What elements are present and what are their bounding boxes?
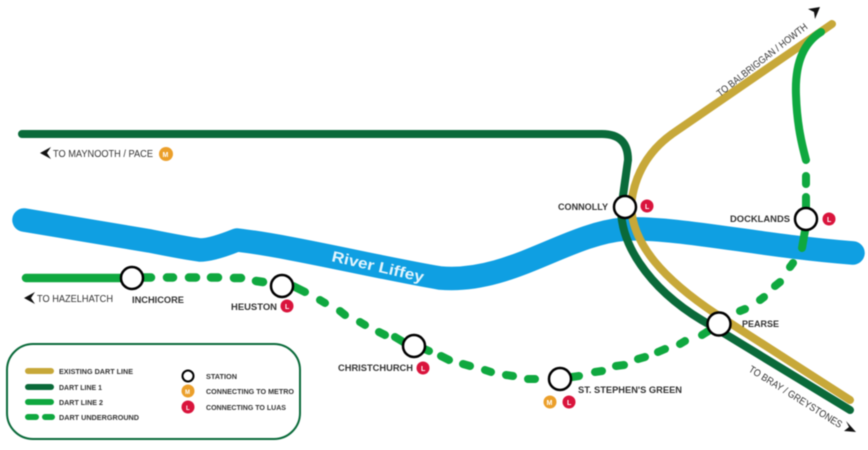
legend: station <box>182 370 237 382</box>
station: St. Stephen's Green: M <box>546 400 552 407</box>
station: Christchurch: L <box>421 366 426 373</box>
legend: connecting to Luas: CONNECTING TO LUAS <box>206 405 286 412</box>
station: Heuston: HEUSTON <box>231 302 277 312</box>
legend: connecting to Luas <box>182 400 286 414</box>
river: Liffey <box>24 220 853 286</box>
direction label: Balbriggan / Howth: TO BALBRIGGAN / HOWTH <box>715 22 810 99</box>
station: St. Stephen's Green <box>544 368 682 408</box>
line: DART underground Inchicore to Heuston <box>143 278 263 282</box>
legend: DART line 1: DART LINE 1 <box>59 385 102 392</box>
station: Docklands: DOCKLANDS <box>730 214 790 224</box>
legend: DART line 2: DART LINE 2 <box>59 400 103 407</box>
legend: existing DART line <box>28 369 133 376</box>
station: Pearse: PEARSE <box>742 319 779 329</box>
station: Docklands <box>730 208 836 230</box>
legend: DART line 2 <box>28 400 103 407</box>
legend: existing DART line: EXISTING DART LINE <box>59 369 133 376</box>
station: Connolly: L <box>645 204 650 211</box>
station: Heuston: L <box>285 304 290 311</box>
line: DART underground centre <box>565 325 718 378</box>
legend: DART line 1 <box>28 385 102 392</box>
line: DART line 2 solid north <box>796 32 821 160</box>
direction label: Maynooth / Pace: TO MAYNOOTH / PACE <box>53 149 153 160</box>
line: DART underground Heuston to Christchurch <box>293 286 405 343</box>
line: existing DART <box>631 24 850 400</box>
station: St. Stephen's Green: L <box>567 400 572 407</box>
legend: DART underground: DART UNDERGROUND <box>59 415 139 422</box>
direction label: Hazelhatch: TO HAZELHATCH <box>37 294 113 305</box>
line: DART line 2 solid west <box>26 274 132 282</box>
direction label: Bray / Greystones: TO BRAY / GREYSTONES <box>746 364 844 431</box>
station: Christchurch <box>338 335 430 374</box>
legend: connecting to Luas: L <box>186 406 190 412</box>
direction label: Maynooth / Pace: M <box>162 152 168 159</box>
station: St. Stephen's Green: ST. STEPHEN'S GREEN <box>578 385 682 395</box>
station: Inchicore <box>121 267 184 305</box>
legend: station: STATION <box>206 374 237 381</box>
legend: connecting to metro: M <box>185 390 190 396</box>
legend: connecting to metro <box>182 384 295 398</box>
station: Christchurch: CHRISTCHURCH <box>338 363 413 373</box>
river label: River Liffey <box>330 248 426 286</box>
legend <box>7 344 300 439</box>
line: DART underground south-east <box>740 225 806 311</box>
legend: DART underground <box>28 415 139 422</box>
direction label: Hazelhatch <box>24 292 113 305</box>
station: Heuston <box>231 275 294 312</box>
line: DART underground north <box>802 176 810 219</box>
line: DART underground Christchurch to Stephen's Green <box>420 347 535 379</box>
station: Inchicore: INCHICORE <box>132 295 184 305</box>
station: Docklands: L <box>827 217 832 224</box>
station: Pearse <box>708 312 779 336</box>
station: Connolly: CONNOLLY <box>558 202 608 212</box>
station: Connolly <box>558 196 654 218</box>
legend: connecting to metro: CONNECTING TO METRO <box>206 389 295 396</box>
direction label: Maynooth / Pace <box>40 147 173 161</box>
line: DART line 1 <box>22 134 850 410</box>
